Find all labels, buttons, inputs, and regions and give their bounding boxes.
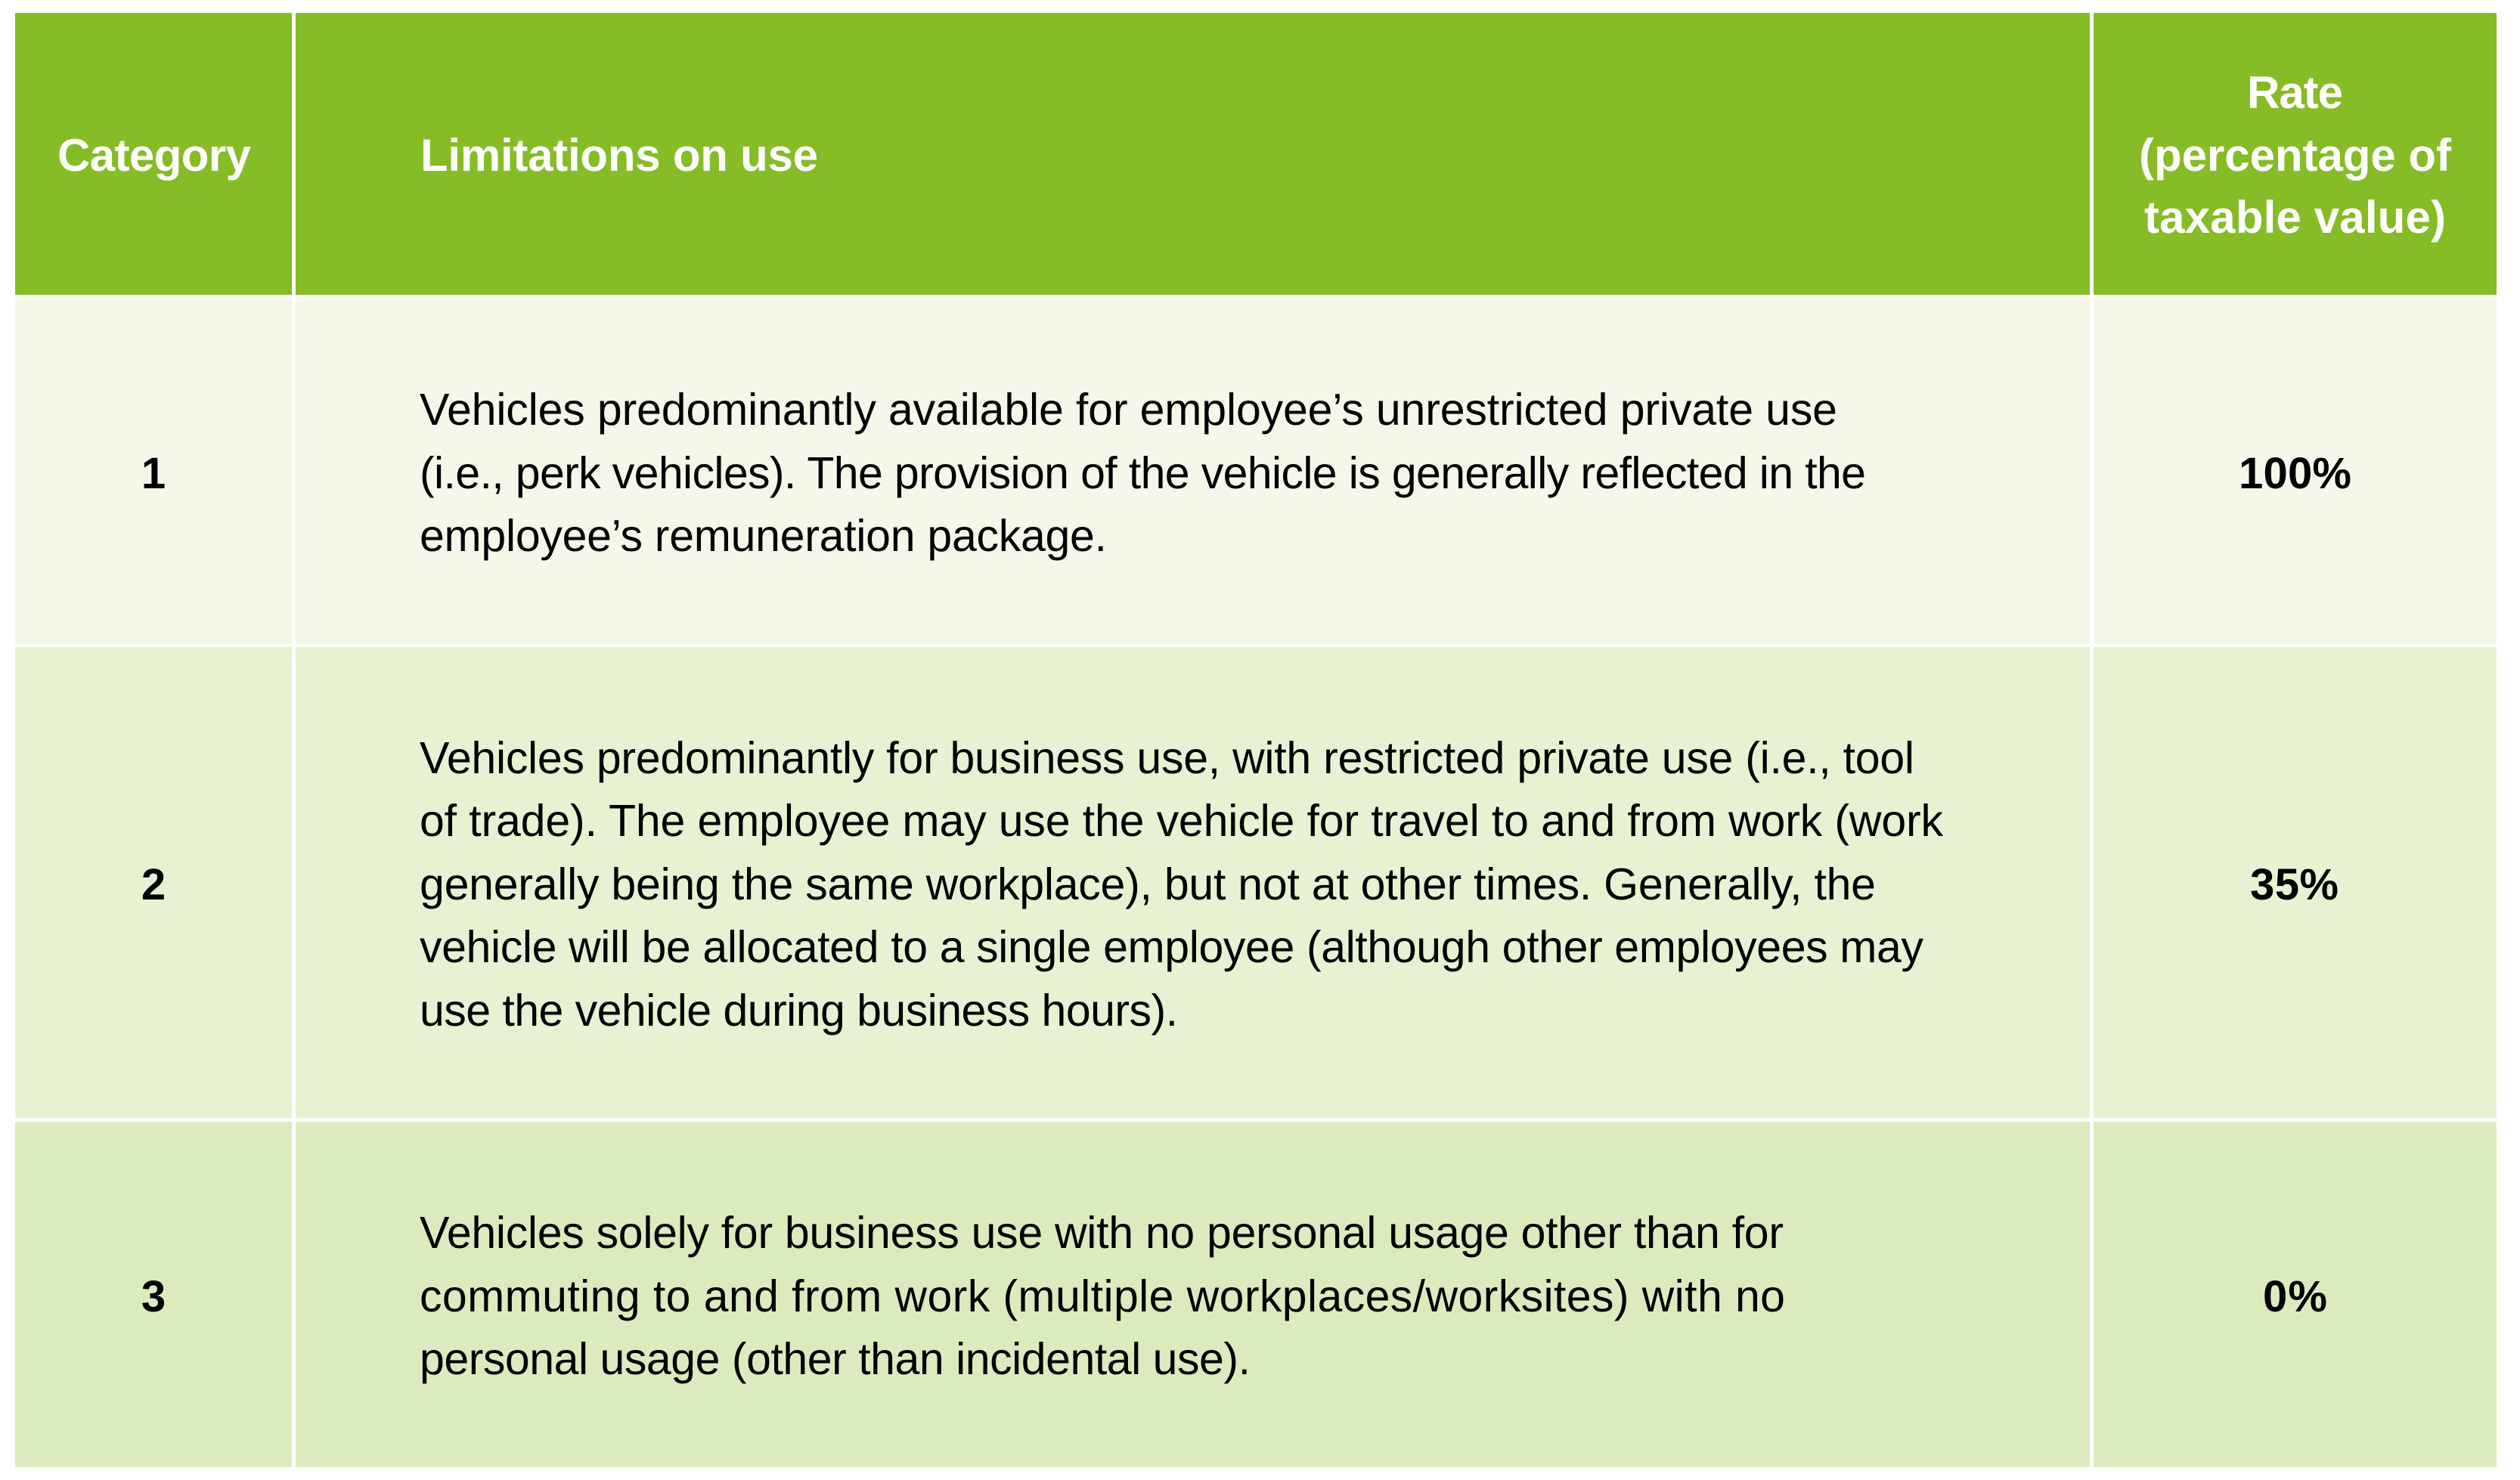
heading: category: Category [57,130,252,181]
row: category 2 [15,647,2497,1118]
description 1 [420,385,1866,561]
row: category 1 [15,298,2497,644]
heading: rate [2139,67,2452,243]
description 3: personal usage (other than incidental use). [420,1334,1251,1384]
rate 0%: 0% [2263,1272,2327,1321]
category number 3: 3 [141,1272,166,1321]
heading: limitations on use: Limitations on use [420,130,818,181]
description 1: Vehicles predominantly available for employee’s unrestricted private use [420,385,1837,435]
description 3: Vehicles solely for business use with no personal usage other than for [420,1208,1784,1258]
row: category 3 [15,1122,2497,1467]
rate 100%: 100% [2239,449,2351,498]
description 3: commuting to and from work (multiple workplaces/worksites) with no [420,1271,1785,1321]
description 2: Vehicles predominantly for business use, with restricted private use (i.e., tool [420,733,1914,783]
description 2: generally being the same workplace), but not at other times. Generally, the [420,859,1876,909]
category number 1: 1 [141,449,166,498]
category number 2: 2 [141,860,166,909]
description 1: employee’s remuneration package. [420,511,1107,561]
description 1: (i.e., perk vehicles). The provision of the vehicle is generally reflected in the [420,448,1866,498]
description 2: use the vehicle during business hours). [420,986,1178,1036]
heading: rate: (percentage of [2139,130,2452,181]
description 2: vehicle will be allocated to a single employee (although other employees may [420,922,1923,972]
description 2 [420,733,1943,1036]
description 3 [420,1208,1785,1384]
description 2: of trade). The employee may use the vehicle for travel to and from work (work [420,796,1943,846]
rate 35%: 35% [2250,860,2339,909]
header row [15,13,2497,295]
heading: rate: Rate [2247,67,2343,118]
heading: rate: taxable value) [2144,192,2446,243]
